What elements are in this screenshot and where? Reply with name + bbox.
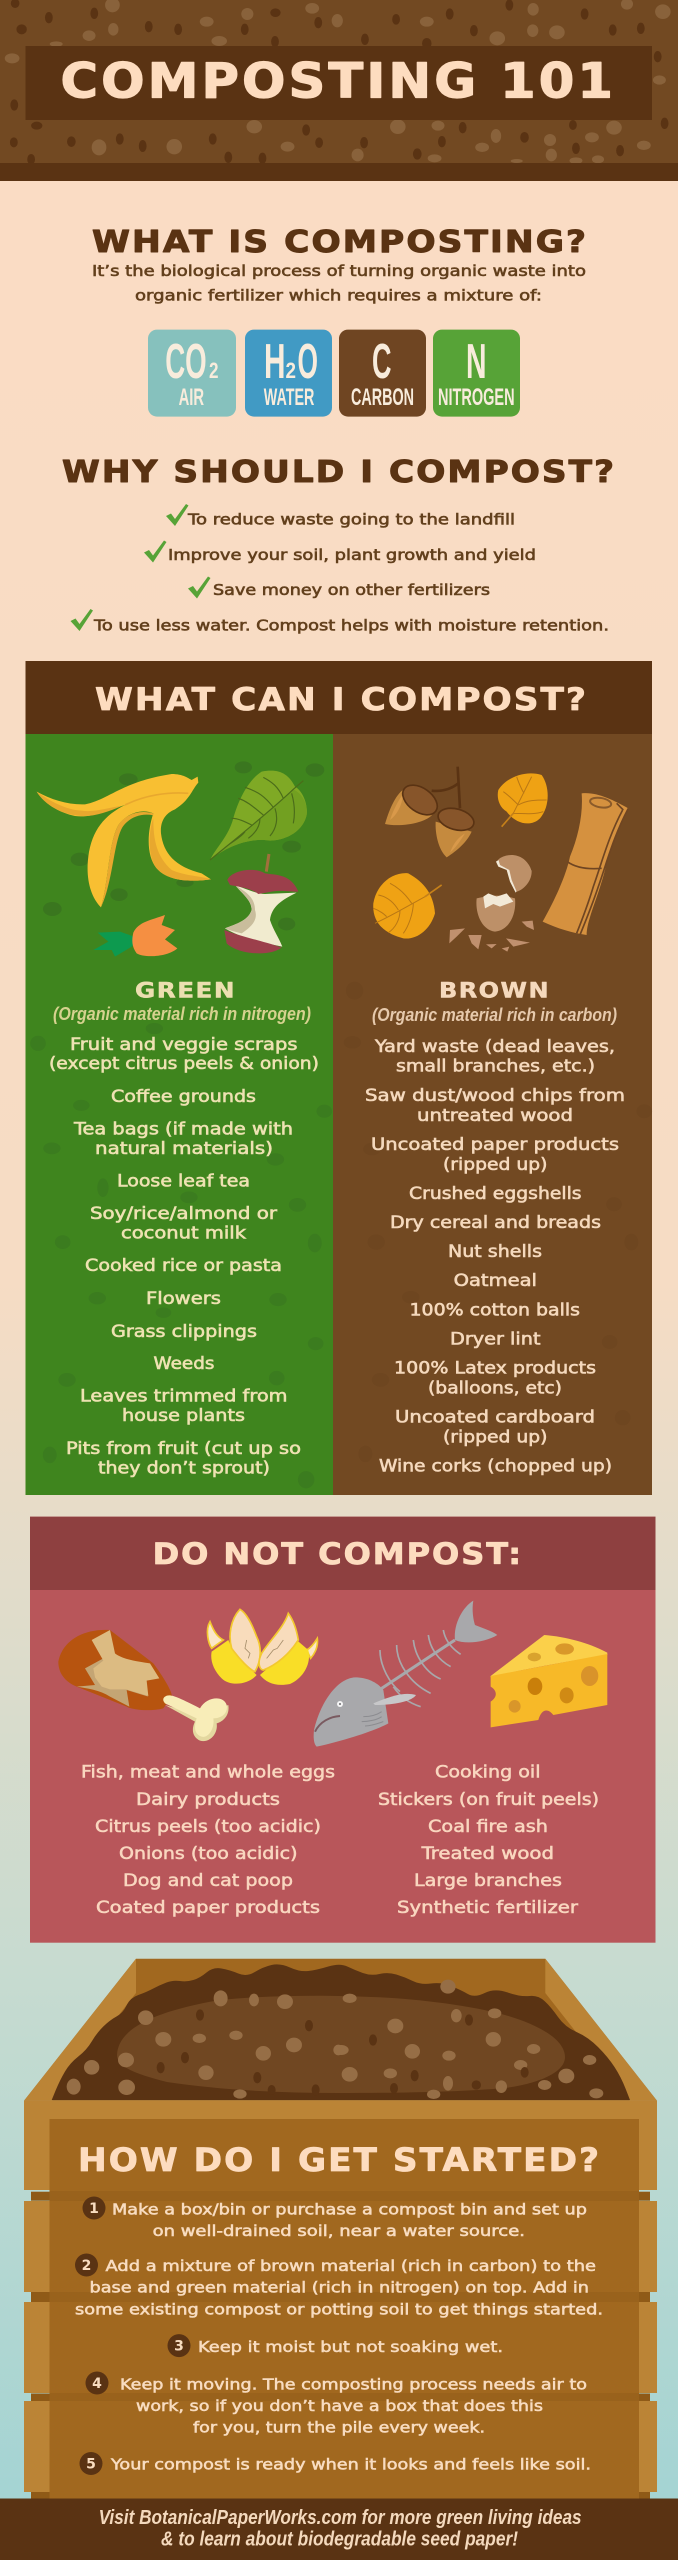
header banner — [0, 0, 678, 181]
tile: C carbon: CARBON — [351, 384, 414, 411]
icon: orange leaf — [373, 873, 442, 938]
bin right wall — [545, 1959, 657, 2101]
list: green materials: coconut milk — [121, 1224, 247, 1243]
reason 1 — [166, 504, 515, 528]
panel: green column — [26, 734, 333, 1495]
icon: acorns — [385, 767, 476, 857]
list: do not compost right: Cooking oil — [435, 1763, 540, 1782]
list: green materials: Cooked rice or pasta — [85, 1256, 282, 1275]
icon: cheese wedge — [491, 1635, 607, 1727]
list: do not compost right: Synthetic fertilizer — [397, 1898, 578, 1917]
step 4 — [86, 2372, 587, 2436]
step 1 — [82, 2196, 587, 2240]
step 3 — [168, 2334, 503, 2357]
list: do not compost right — [378, 1763, 599, 1917]
note: green material: (Organic material rich in nitrogen) — [53, 1004, 311, 1024]
panel header — [26, 661, 652, 734]
list: green materials — [49, 1035, 319, 1478]
list: do not compost right: Stickers (on fruit peels) — [378, 1790, 599, 1809]
title: COMPOSTING 101 — [60, 54, 616, 110]
step 2: base and green material (rich in nitrogen) on top. Add in — [90, 2279, 589, 2297]
icon: fish skeleton — [314, 1601, 497, 1747]
panel: what can I compost — [26, 661, 652, 1495]
list: green materials: Tea bags (if made with — [73, 1120, 293, 1139]
list: brown materials: Uncoated cardboard — [395, 1408, 595, 1426]
illustration: compost bin — [24, 1959, 657, 2499]
step 5 — [80, 2452, 591, 2475]
tile: H2O water: 2 — [286, 358, 296, 383]
footer: Visit BotanicalPaperWorks.com for more green living ideas — [99, 2507, 582, 2529]
list: brown materials: (ripped up) — [443, 1428, 548, 1446]
list: brown materials: Saw dust/wood chips from — [365, 1086, 625, 1105]
list: green materials: (except citrus peels & onion) — [49, 1054, 319, 1073]
tile: CO2 air — [148, 330, 236, 417]
list: brown materials: (ripped up) — [443, 1155, 548, 1174]
panel: do not compost — [30, 1517, 656, 1943]
list: green materials: natural materials) — [95, 1139, 273, 1158]
list: brown materials: Uncoated paper products — [371, 1135, 619, 1154]
list: do not compost right: Coal fire ash — [428, 1817, 548, 1836]
list: green materials: Loose leaf tea — [117, 1172, 250, 1191]
tile: CO2 air: 2 — [209, 358, 218, 383]
list: green materials: Weeds — [154, 1354, 214, 1373]
step 5: 5 — [86, 2456, 96, 2472]
bin back wall — [24, 1959, 657, 2101]
text block: composting definition — [92, 262, 586, 304]
list: green materials: Leaves trimmed from — [80, 1386, 288, 1406]
heading: why should I compost: WHY SHOULD I COMPOST? — [62, 455, 616, 490]
list: do not compost left: Citrus peels (too acidic) — [95, 1817, 321, 1836]
icon: chicken leg — [58, 1630, 229, 1741]
list: green materials: Fruit and veggie scraps — [70, 1035, 298, 1054]
tile: N nitrogen: N — [466, 335, 486, 389]
reason 2 — [144, 540, 536, 564]
bin left wall — [24, 1959, 136, 2101]
list: brown materials: (balloons, etc) — [428, 1379, 562, 1398]
panel header — [30, 1517, 656, 1590]
step 4: for you, turn the pile every week. — [193, 2418, 485, 2436]
tile: N nitrogen — [433, 330, 520, 417]
reason 1: To reduce waste going to the landfill — [187, 510, 515, 528]
footer — [0, 2498, 678, 2560]
icon: carrot top — [93, 915, 177, 957]
icon: eggshells — [449, 855, 534, 952]
tile: CO2 air: CO — [165, 335, 207, 389]
icon: lemon peels — [207, 1609, 317, 1685]
step 2: Add a mixture of brown material (rich in carbon) to the — [106, 2257, 596, 2275]
list: green materials: they don’t sprout) — [98, 1458, 270, 1478]
list: brown materials: 100% cotton balls — [410, 1300, 580, 1319]
tile: H2O water: O — [298, 335, 318, 389]
step 1: on well-drained soil, near a water source. — [153, 2222, 525, 2240]
subheading: brown: BROWN — [439, 978, 550, 1002]
note: brown material: (Organic material rich in carbon) — [372, 1005, 617, 1025]
list: green materials: house plants — [122, 1406, 245, 1425]
text block: composting definition: It’s the biological process of turning organic waste into — [92, 262, 586, 280]
icon: leaf — [210, 771, 307, 860]
step 2 — [75, 2254, 603, 2318]
icon: banana peel — [37, 774, 211, 907]
list: brown materials: untreated wood — [417, 1106, 573, 1125]
heading: how do I get started: HOW DO I GET STARTED? — [78, 2141, 601, 2179]
list: brown materials: small branches, etc.) — [396, 1057, 595, 1076]
list: brown materials: Dry cereal and breads — [390, 1213, 601, 1232]
reason 3 — [188, 576, 490, 599]
list: do not compost left: Dog and cat poop — [123, 1871, 293, 1890]
icon: yellow leaf — [498, 773, 548, 827]
heading: what is composting: WHAT IS COMPOSTING? — [92, 225, 588, 260]
text block: composting definition: organic fertilizer which requires a mixture of: — [135, 286, 542, 304]
step 4: work, so if you don’t have a box that does this — [136, 2397, 543, 2415]
list: brown materials: Oatmeal — [454, 1271, 537, 1290]
list: do not compost left — [81, 1763, 335, 1917]
list: brown materials: Crushed eggshells — [409, 1184, 582, 1203]
list: green materials: Flowers — [146, 1289, 221, 1308]
list: green materials: Soy/rice/almond or — [90, 1204, 277, 1223]
subheading: green: GREEN — [135, 978, 236, 1002]
panel: brown column — [333, 734, 652, 1495]
list: green materials: Coffee grounds — [111, 1087, 256, 1106]
tile: H2O water — [245, 330, 332, 417]
tile: N nitrogen: NITROGEN — [438, 384, 515, 411]
compost pile — [52, 1964, 630, 2100]
list: green materials: Pits from fruit (cut up so — [66, 1439, 301, 1458]
list: green materials: Grass clippings — [111, 1322, 257, 1341]
bin front planks — [24, 2101, 657, 2499]
step 1: Make a box/bin or purchase a compost bin and set up — [112, 2200, 587, 2218]
heading: do not compost: DO NOT COMPOST: — [153, 1537, 523, 1571]
list: brown materials: Yard waste (dead leaves, — [374, 1037, 615, 1056]
reason 4 — [70, 609, 609, 634]
step 4: Keep it moving. The composting process needs air to — [120, 2376, 587, 2394]
footer: & to learn about biodegradable seed paper! — [161, 2528, 518, 2550]
step 2: some existing compost or potting soil to get things started. — [75, 2300, 603, 2318]
list: do not compost left: Coated paper products — [96, 1898, 320, 1917]
list: do not compost left: Onions (too acidic) — [119, 1844, 298, 1863]
step 1: 1 — [89, 2201, 99, 2217]
tile: H2O water: H — [264, 335, 286, 389]
list: do not compost left: Fish, meat and whole eggs — [81, 1763, 335, 1782]
list: do not compost right: Large branches — [414, 1871, 562, 1890]
step 3: 3 — [174, 2339, 184, 2355]
tile: CO2 air: AIR — [179, 384, 204, 411]
tile: C carbon: C — [372, 335, 392, 389]
reason 2: Improve your soil, plant growth and yield — [168, 546, 536, 564]
list: brown materials: Wine corks (chopped up) — [379, 1456, 612, 1475]
list: brown materials: Dryer lint — [450, 1330, 541, 1349]
list: reasons to compost — [70, 504, 609, 634]
icon: apple core — [224, 854, 298, 953]
tile: H2O water: WATER — [264, 384, 314, 411]
list: do not compost left: Dairy products — [136, 1790, 280, 1809]
list: do not compost right: Treated wood — [420, 1844, 554, 1863]
step 5: Your compost is ready when it looks and feels like soil. — [110, 2456, 591, 2474]
list: brown materials: 100% Latex products — [394, 1359, 596, 1378]
list: getting started steps — [75, 2196, 603, 2475]
step 3: Keep it moist but not soaking wet. — [198, 2338, 503, 2356]
step 4: 4 — [92, 2376, 102, 2392]
list: brown materials — [365, 1037, 625, 1475]
icon: paper roll — [543, 793, 628, 935]
icons: compost ingredients — [148, 330, 520, 417]
tile: C carbon — [339, 330, 426, 417]
heading: what can I compost: WHAT CAN I COMPOST? — [95, 682, 588, 718]
reason 4: To use less water. Compost helps with moisture retention. — [93, 616, 609, 634]
step 2: 2 — [82, 2258, 91, 2274]
reason 3: Save money on other fertilizers — [213, 581, 490, 599]
list: brown materials: Nut shells — [448, 1242, 542, 1261]
